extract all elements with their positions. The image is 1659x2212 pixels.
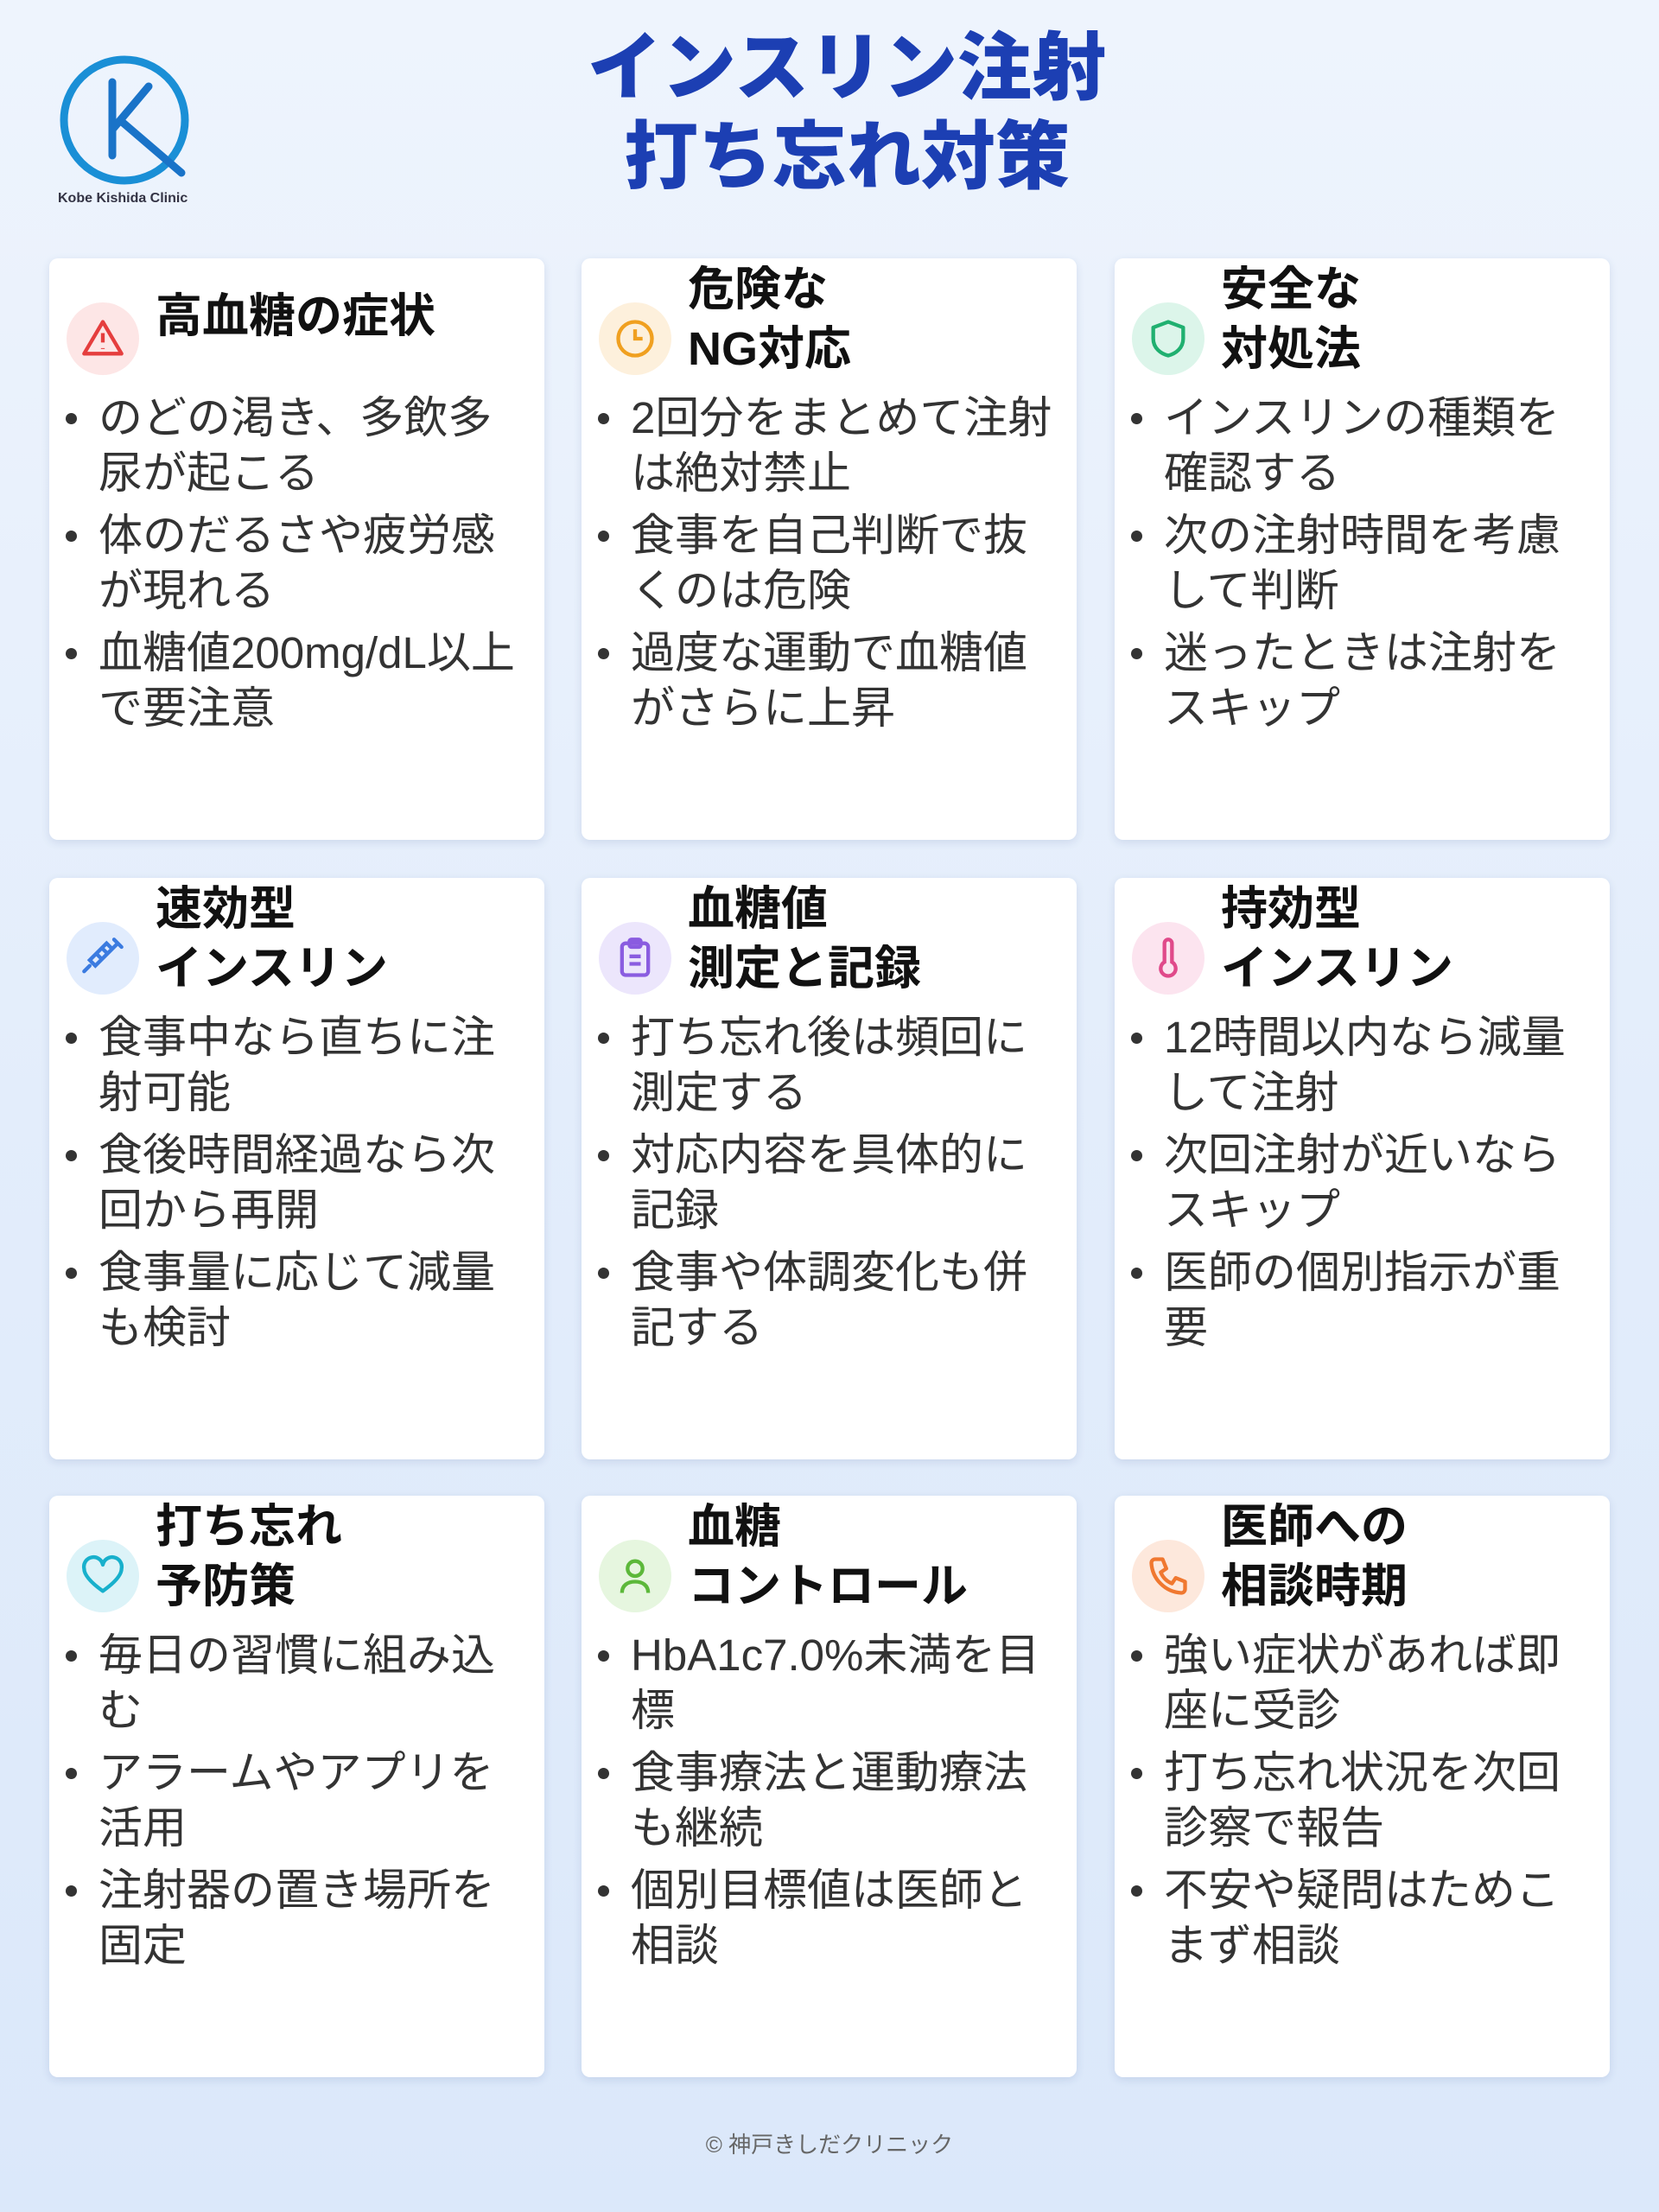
list: スキップ	[1164, 683, 1340, 733]
list: 過度な運動で血糖値	[631, 628, 1027, 677]
list: も継続	[631, 1803, 763, 1853]
icon: warning	[67, 302, 139, 375]
list: で要注意	[99, 683, 275, 733]
heading	[1221, 1501, 1408, 1612]
panel: 安全な対処法	[1115, 258, 1610, 840]
list: 打ち忘れ状況を次回	[1164, 1748, 1560, 1797]
list: 射可能	[99, 1068, 231, 1117]
heading: 対処法	[1221, 323, 1361, 375]
list: 迷ったときは注射を	[1164, 628, 1560, 677]
list: 記録	[631, 1185, 719, 1235]
list: 毎日の習慣に組み込	[99, 1630, 495, 1680]
list: まず相談	[1164, 1921, 1340, 1970]
list: が現れる	[99, 566, 275, 615]
heading: 血糖	[688, 1501, 781, 1553]
list	[66, 393, 515, 733]
panel: 持効型インスリン	[1115, 878, 1610, 1459]
list: 体のだるさや疲労感	[99, 511, 495, 560]
list	[1131, 1630, 1560, 1970]
title	[588, 27, 1106, 199]
heading	[688, 883, 921, 995]
heading	[156, 1501, 342, 1612]
list: 不安や疑問はためこ	[1164, 1866, 1560, 1915]
heading: 速効型	[156, 883, 296, 935]
icon: person	[599, 1540, 671, 1612]
list: 要	[1164, 1303, 1208, 1352]
list: 医師の個別指示が重	[1164, 1248, 1560, 1297]
list: 次の注射時間を考慮	[1164, 511, 1560, 560]
heading: 相談時期	[1221, 1560, 1408, 1612]
list: スキップ	[1164, 1185, 1340, 1235]
list: 食事中なら直ちに注	[99, 1013, 495, 1062]
list: 2回分をまとめて注射	[631, 393, 1052, 442]
panel: 速効型インスリン	[49, 878, 544, 1459]
list: くのは危険	[631, 566, 851, 615]
logo	[58, 55, 188, 206]
heading	[688, 264, 851, 375]
heading: 予防策	[156, 1560, 296, 1612]
heading: 安全な	[1221, 264, 1361, 315]
list: 食事療法と運動療法	[631, 1748, 1027, 1797]
list: 打ち忘れ後は頻回に	[631, 1013, 1027, 1062]
list: 記する	[631, 1303, 763, 1352]
heading: インスリン	[156, 943, 388, 995]
list	[1131, 393, 1560, 733]
list: も検討	[99, 1303, 231, 1352]
heading: 危険な	[688, 264, 828, 315]
list: 個別目標値は医師と	[631, 1866, 1027, 1915]
list: インスリンの種類を	[1164, 393, 1560, 442]
list: む	[99, 1686, 143, 1735]
list: 食事や体調変化も併	[631, 1248, 1027, 1297]
list: 診察で報告	[1164, 1803, 1384, 1853]
icon: shield	[1132, 302, 1205, 375]
list: 活用	[99, 1803, 187, 1853]
list: 対応内容を具体的に	[631, 1130, 1027, 1179]
list	[598, 1630, 1039, 1970]
heading: インスリン	[1221, 943, 1453, 995]
list: 尿が起こる	[99, 448, 319, 498]
panel: 医師への相談時期	[1115, 1496, 1610, 2077]
icon: syringe	[67, 922, 139, 995]
panel: 打ち忘れ予防策	[49, 1496, 544, 2077]
list	[598, 1013, 1027, 1352]
list: 血糖値200mg/dL以上	[99, 628, 515, 677]
list	[66, 1630, 495, 1970]
list: 確認する	[1164, 448, 1340, 498]
heading	[1221, 883, 1453, 995]
list: 回から再開	[99, 1185, 319, 1235]
heading: 医師への	[1221, 1501, 1408, 1553]
icon: clock	[599, 302, 671, 375]
panel: 高血糖の症状	[49, 258, 544, 840]
list: 固定	[99, 1921, 187, 1970]
list: 食事を自己判断で抜	[631, 511, 1027, 560]
heading: 持効型	[1221, 883, 1361, 935]
list	[1131, 1013, 1566, 1352]
list: 座に受診	[1164, 1686, 1340, 1735]
list: 測定する	[631, 1068, 807, 1117]
panel: 血糖値測定と記録	[582, 878, 1077, 1459]
footer: © 神戸きしだクリニック	[706, 2132, 953, 2158]
heading: 測定と記録	[688, 943, 921, 995]
heading	[156, 883, 388, 995]
title: インスリン注射	[588, 27, 1106, 110]
heading: 打ち忘れ	[156, 1501, 342, 1553]
list: して判断	[1164, 566, 1338, 615]
heading	[688, 1501, 968, 1612]
list	[598, 393, 1052, 733]
heading: コントロール	[688, 1560, 968, 1612]
list: 次回注射が近いなら	[1164, 1130, 1560, 1179]
panel: 血糖コントロール	[582, 1496, 1077, 2077]
list: のどの渇き、多飲多	[99, 393, 492, 442]
list: 相談	[631, 1921, 719, 1970]
panel: 危険なNG対応	[582, 258, 1077, 840]
heading: 高血糖の症状	[156, 290, 435, 342]
heading: NG対応	[688, 323, 851, 375]
title: 打ち忘れ対策	[624, 116, 1070, 199]
list: がさらに上昇	[631, 683, 895, 733]
list: HbA1c7.0%未満を目	[631, 1630, 1039, 1680]
list: して注射	[1164, 1068, 1338, 1117]
list: アラームやアプリを	[99, 1748, 493, 1797]
icon: phone	[1132, 1540, 1205, 1612]
heading: 血糖値	[688, 883, 828, 935]
list	[66, 1013, 495, 1352]
list: は絶対禁止	[631, 448, 851, 498]
list: 12時間以内なら減量	[1164, 1013, 1566, 1062]
logo: Kobe Kishida Clinic	[58, 191, 188, 206]
icon: thermometer	[1132, 922, 1205, 995]
heading	[1221, 264, 1361, 375]
list: 食事量に応じて減量	[99, 1248, 495, 1297]
list: 強い症状があれば即	[1164, 1630, 1560, 1680]
list: 標	[631, 1686, 675, 1735]
icon: clipboard	[599, 922, 671, 995]
list: 食後時間経過なら次	[99, 1130, 495, 1179]
icon: heart	[67, 1540, 139, 1612]
list: 注射器の置き場所を	[99, 1866, 495, 1915]
